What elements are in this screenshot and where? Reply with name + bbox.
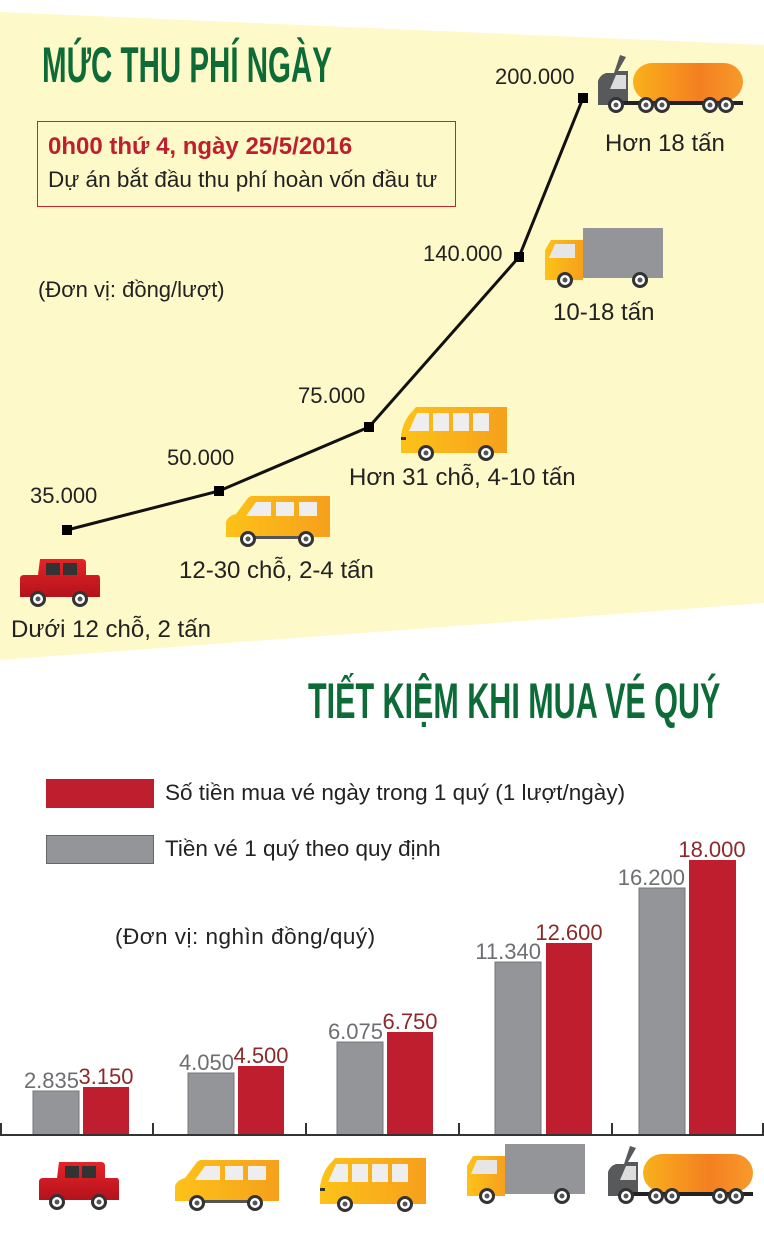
bar chart: 6.075 [328, 1019, 383, 1044]
bar chart: 2.835 [24, 1068, 79, 1093]
bar chart: 11.340 [475, 939, 541, 964]
bar chart: 18.000 [678, 837, 746, 862]
text: 140.000 [423, 241, 503, 266]
text: 200.000 [495, 64, 575, 89]
title 2: TIẾT KIỆM KHI MUA VÉ QUÝ [308, 673, 720, 729]
vehicle labels: Dưới 12 chỗ, 2 tấn [11, 616, 211, 643]
text: 50.000 [167, 445, 234, 470]
line chart [20, 55, 743, 607]
value labels: 35.000 [30, 483, 97, 508]
bar chart: 12.600 [535, 920, 603, 945]
callout: date box: 0h00 thứ 4, ngày 25/5/2016 [48, 133, 352, 160]
bar chart: 4.500 [233, 1043, 289, 1068]
unit note: (Đơn vị: đồng/lượt) [38, 277, 225, 302]
bar chart: 4.050 [179, 1050, 234, 1075]
title: MỨC THU PHÍ NGÀY [42, 37, 332, 93]
text: 10-18 tấn [553, 299, 654, 326]
legend [46, 779, 625, 864]
callout: date box [37, 121, 456, 207]
legend: Số tiền mua vé ngày trong 1 quý (1 lượt/ngày) [165, 780, 625, 805]
legend: Tiền vé 1 quý theo quy định [165, 836, 441, 861]
unit note 2: (Đơn vị: nghìn đồng/quý) [115, 924, 376, 949]
bar chart: 3.150 [78, 1064, 134, 1089]
text: 75.000 [298, 383, 365, 408]
text: 12-30 chỗ, 2-4 tấn [179, 557, 374, 584]
bar chart: 16.200 [618, 865, 685, 890]
text: Hơn 18 tấn [605, 130, 725, 157]
callout: date box: Dự án bắt đầu thu phí hoàn vốn đầu tư [48, 167, 437, 192]
bar chart: 6.750 [382, 1009, 438, 1034]
text: Hơn 31 chỗ, 4-10 tấn [349, 464, 576, 491]
